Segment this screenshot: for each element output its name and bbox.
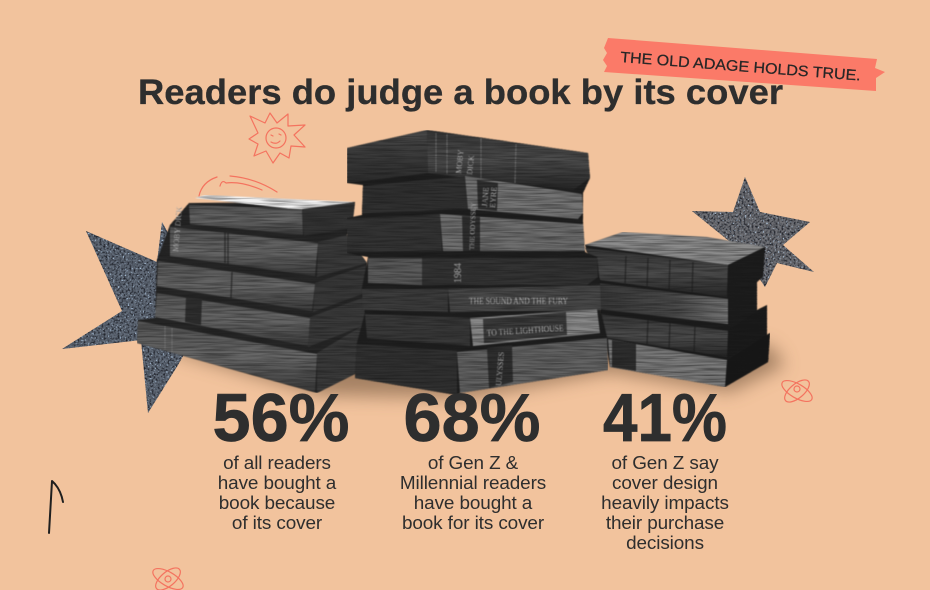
stat: 56%: of its cover <box>232 513 322 534</box>
stat: 68%: book for its cover <box>402 513 544 534</box>
middle stack: Moby Dick: MOBY <box>454 149 466 174</box>
left stack: book 2 <box>170 206 367 277</box>
right stack: bottom book <box>608 333 770 387</box>
left stack: book 3 <box>157 261 367 312</box>
book stack: left <box>137 195 367 393</box>
middle stack: The Odyssey <box>347 202 585 252</box>
stat: 41%: 41% <box>603 380 727 456</box>
stat: 68%: of Gen Z & <box>428 453 519 474</box>
right stack: top book <box>585 232 765 297</box>
stat: 56%: have bought a <box>218 473 337 494</box>
middle stack: The Sound and the Fury: THE SOUND AND THE FURY <box>469 296 568 306</box>
book stack: right <box>585 232 770 387</box>
middle stack: Jane Eyre: JANE <box>480 187 491 207</box>
middle stack: The Sound and the Fury <box>362 285 601 312</box>
stat: 56%: 56% <box>212 380 350 456</box>
stat: 41%: of Gen Z say <box>612 453 719 474</box>
middle stack: The Odyssey: THE ODYSSEY <box>468 202 478 250</box>
doodle: sun <box>249 113 305 163</box>
middle stack: Moby Dick: DICK <box>465 155 476 175</box>
stat: 56% <box>212 380 350 534</box>
middle stack: Jane Eyre <box>362 176 583 219</box>
shadow under book stacks <box>150 345 785 398</box>
middle stack: To the Lighthouse: TO THE LIGHTHOUSE <box>486 323 564 338</box>
middle stack: Moby Dick <box>347 130 590 190</box>
doodle: atom right <box>779 376 815 406</box>
stat: 41% <box>601 380 729 554</box>
stat: 68% <box>400 380 546 534</box>
doodle: atom bottom left <box>150 564 186 590</box>
middle stack: Ulysses <box>355 338 608 395</box>
stat: 68%: Millennial readers <box>400 473 546 494</box>
stat: 68%: 68% <box>404 380 540 456</box>
stat: 56%: of all readers <box>223 453 331 474</box>
middle stack: 1984 <box>368 258 598 285</box>
left stack: bottom book <box>137 321 367 393</box>
stat: 41%: heavily impacts <box>601 493 729 514</box>
stat: 56%: book because <box>219 493 335 514</box>
stat: 68%: have bought a <box>414 493 533 514</box>
book stack: middle <box>347 130 608 395</box>
tape label: THE OLD ADAGE HOLDS TRUE. <box>620 49 861 84</box>
decorative star: right <box>692 177 814 287</box>
left stack: book 4 <box>155 293 365 347</box>
right stack: book 3 <box>600 305 767 358</box>
left stack: top book <box>189 195 355 236</box>
stat: 41%: their purchase <box>606 513 724 534</box>
middle stack: To the Lighthouse <box>365 309 600 346</box>
right stack: book 2 <box>597 282 757 325</box>
tape label <box>603 38 885 91</box>
decorative star: left <box>62 222 215 413</box>
middle stack: Jane Eyre: EYRE <box>488 186 499 208</box>
left stack: book 2: MOBY DICK <box>171 206 184 252</box>
stat: 41%: cover design <box>612 473 718 494</box>
doodle: swoosh lines <box>199 176 277 196</box>
middle stack: 1984: 1984 <box>453 263 464 283</box>
doodle: black arrow mark <box>49 481 63 533</box>
stat: 41%: decisions <box>626 533 704 554</box>
title: Readers do judge a book by its cover <box>138 73 783 112</box>
middle stack: Ulysses: ULYSSES <box>494 352 506 386</box>
